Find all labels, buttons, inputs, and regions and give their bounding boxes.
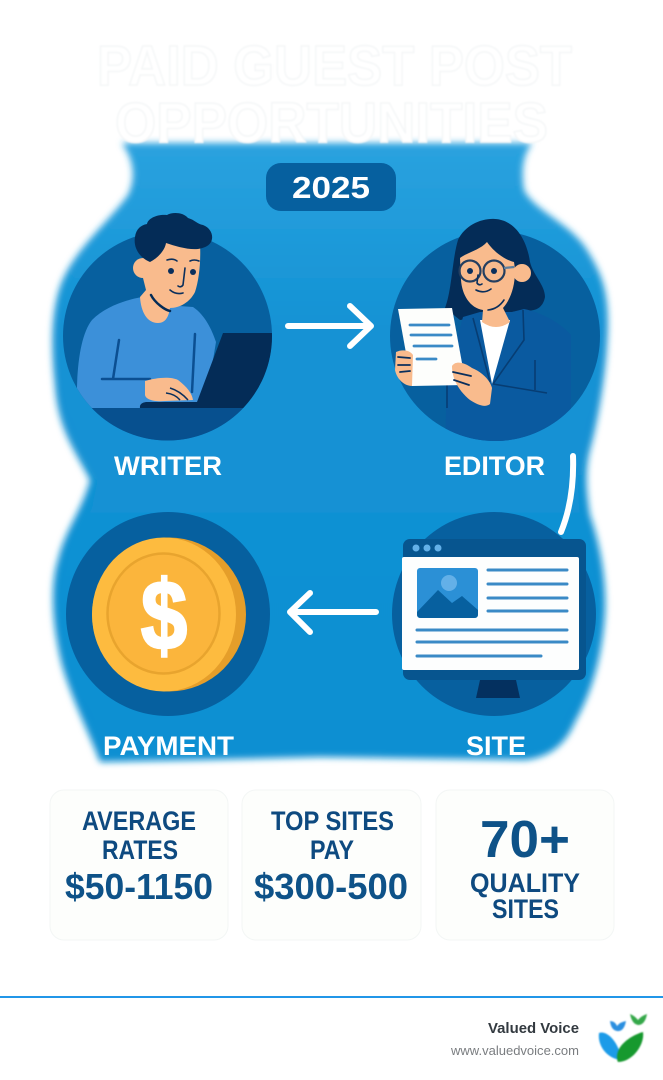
arrow: writer to editor bbox=[288, 306, 371, 346]
hand bbox=[145, 378, 193, 401]
footer line bbox=[0, 996, 663, 998]
stat card: average rates bbox=[50, 790, 228, 940]
hair bbox=[445, 219, 545, 320]
brand url: www.valuedvoice.com bbox=[450, 1043, 579, 1058]
payment illustration bbox=[66, 512, 270, 716]
image placeholder bbox=[417, 568, 478, 618]
stat card: top sites pay: PAY bbox=[310, 835, 354, 865]
coin bbox=[92, 538, 246, 692]
site illustration bbox=[392, 512, 596, 716]
stat card: quality sites bbox=[436, 790, 614, 940]
screen bbox=[402, 557, 579, 670]
title: OPPORTUNITIES bbox=[115, 91, 548, 155]
year badge bbox=[266, 163, 396, 211]
label: writer: WRITER bbox=[114, 451, 222, 481]
label: site: SITE bbox=[466, 731, 526, 761]
arrow: site to payment bbox=[290, 593, 376, 632]
dollar sign: $ bbox=[141, 562, 187, 671]
curved connector: editor to site bbox=[561, 456, 573, 532]
label: editor: EDITOR bbox=[444, 451, 545, 481]
monitor stand bbox=[476, 680, 520, 698]
browser dots bbox=[412, 544, 442, 552]
brand name: Valued Voice bbox=[488, 1020, 579, 1037]
stat card: average rates: AVERAGE bbox=[82, 806, 196, 836]
writer illustration bbox=[60, 213, 280, 447]
title bbox=[97, 34, 572, 155]
jacket bbox=[445, 309, 571, 450]
monitor frame bbox=[403, 539, 586, 680]
logo bbox=[599, 1014, 647, 1062]
stat card: top sites pay bbox=[242, 790, 421, 940]
stat card: quality sites: QUALITY bbox=[470, 868, 580, 898]
stat card: top sites pay: TOP SITES bbox=[271, 806, 394, 836]
hair bbox=[135, 213, 212, 262]
editor illustration bbox=[390, 219, 600, 450]
laptop bbox=[140, 333, 280, 408]
glasses bbox=[460, 260, 514, 282]
face and neck bbox=[460, 242, 515, 327]
document bbox=[398, 308, 466, 386]
stat card: quality sites: 70+ bbox=[480, 811, 570, 869]
title: PAID GUEST POST bbox=[97, 34, 572, 98]
hands bbox=[395, 350, 413, 386]
stat card: average rates: RATES bbox=[102, 835, 178, 865]
label: payment: PAYMENT bbox=[103, 731, 235, 761]
shirt bbox=[480, 320, 510, 384]
stat card: average rates: $50-1150 bbox=[65, 866, 213, 907]
text lines bbox=[417, 570, 567, 656]
stat card: quality sites: SITES bbox=[492, 894, 559, 924]
year badge: 2025 bbox=[292, 170, 370, 205]
background blue shape bbox=[52, 143, 608, 762]
stat card: top sites pay: $300-500 bbox=[254, 866, 408, 907]
facial features bbox=[167, 259, 199, 294]
neck and face bbox=[140, 238, 200, 323]
